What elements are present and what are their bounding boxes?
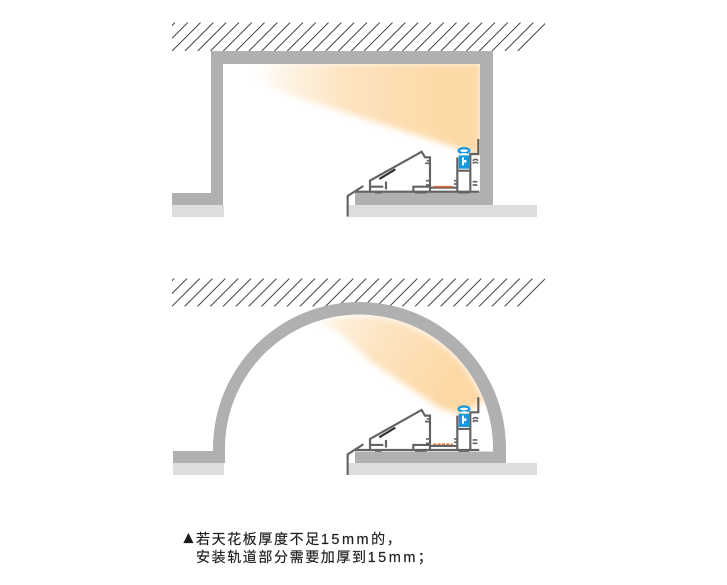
ceiling hatch — [146, 22, 546, 51]
ceiling hatch — [146, 278, 545, 306]
light track profile — [348, 139, 479, 217]
diagrams — [172, 22, 545, 475]
light glow — [245, 63, 481, 156]
arched ceiling — [173, 302, 506, 463]
note line 1: 若天花板厚度不足15mm的， — [196, 531, 402, 548]
icon: triangle bullet: ▲ — [180, 528, 197, 547]
plaster strips — [172, 205, 537, 217]
note line 2: 安装轨道部分需要加厚到15mm； — [196, 549, 434, 566]
light track profile — [348, 397, 479, 475]
top diagram — [146, 22, 546, 217]
light glow — [322, 314, 486, 418]
icon: blue LED — [459, 148, 469, 169]
caption note — [180, 528, 434, 566]
icon: blue LED — [459, 406, 469, 427]
ceiling slab and walls — [172, 51, 493, 205]
plaster strips — [173, 463, 537, 475]
bottom diagram — [146, 278, 545, 475]
